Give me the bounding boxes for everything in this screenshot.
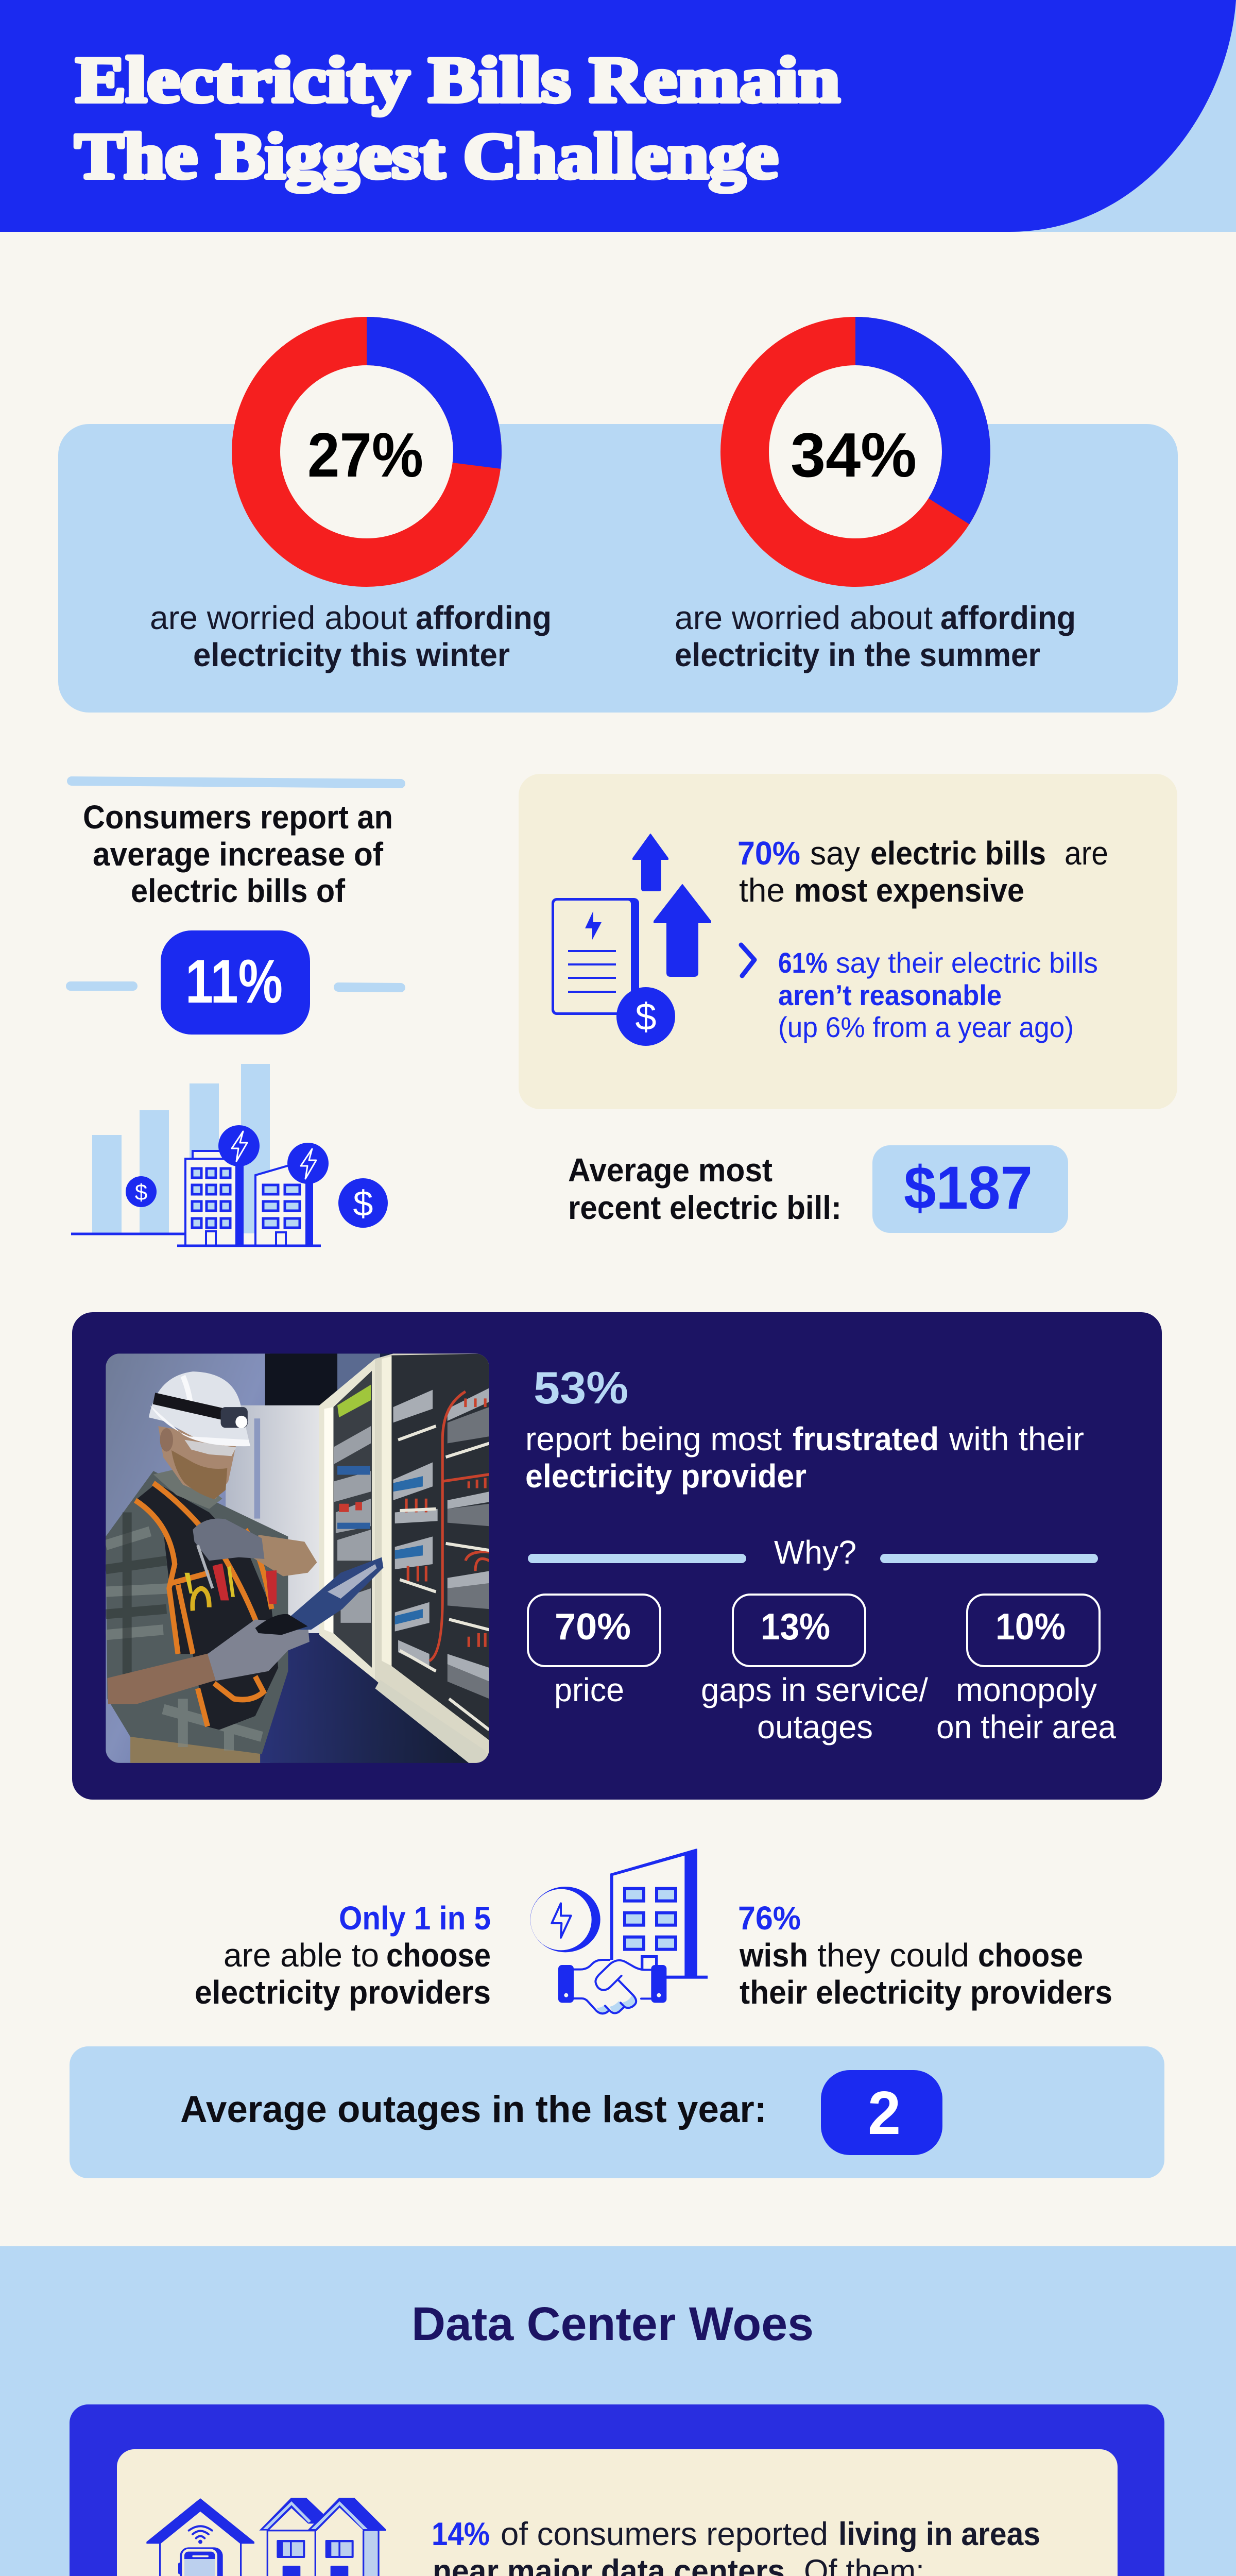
panel: average outages: Average outages in the last year: (180, 2089, 767, 2130)
heading: average increase: Consumers report an (83, 799, 393, 836)
text: 14% of consumers: 14% (432, 2516, 490, 2552)
caption: summer: are worried about (675, 599, 933, 636)
icon: bill with arrows and coin (552, 834, 711, 1046)
cabinet doors (319, 1359, 375, 1680)
photo: electrician at panel (106, 1353, 489, 1763)
text: only 1 in 5: electricity providers (195, 1974, 491, 2011)
card: 14% near data centers (117, 2449, 1118, 2576)
caption: winter: are worried about (150, 599, 407, 636)
badge: 2: 2 (868, 2079, 901, 2147)
reason: gaps in service: outages (757, 1708, 873, 1745)
icon: rising bars with buildings: $ (135, 1180, 147, 1205)
icon: smart home and houses (147, 2498, 386, 2576)
section: data center woes background (0, 2246, 1236, 2576)
text: 61% not reasonable: say their electric bills (836, 946, 1098, 979)
worker body (130, 1737, 261, 1763)
tools in pockets (213, 1564, 229, 1600)
text: only 1 in 5: choose (386, 1937, 491, 1974)
divider: why (528, 1534, 1098, 1571)
text: only 1 in 5: Only 1 in 5 (339, 1900, 491, 1937)
heading: average increase (83, 799, 393, 909)
panel: frustrated with provider (72, 1312, 1162, 1800)
text: 61% not reasonable: 61% (778, 946, 828, 979)
reason: gaps in service: 13% (761, 1606, 830, 1648)
text: 61% not reasonable: aren’t reasonable (778, 979, 1002, 1011)
panel: average outages (70, 2046, 1164, 2178)
badge: 11%: 11% (185, 947, 283, 1016)
badge: 11% (71, 930, 401, 1035)
reason: monopoly (936, 1595, 1116, 1745)
icon: chevron (741, 945, 754, 976)
reason: price: price (554, 1671, 624, 1708)
text: 70% most expensive (737, 835, 1108, 909)
stat: 53%: 53% (534, 1362, 628, 1413)
text: most frustrated (525, 1420, 1084, 1495)
text: most frustrated: electricity provider (525, 1458, 806, 1495)
title (75, 44, 840, 192)
heading: average increase: average increase of (93, 836, 384, 873)
caption: summer: affording (940, 599, 1076, 636)
donut chart: 27% winter (232, 317, 502, 587)
heading: average increase: electric bills of (131, 872, 346, 909)
terminal rows (393, 1388, 489, 1682)
text: 70% most expensive: the (739, 872, 785, 909)
donut chart: 27% winter: 27% (307, 420, 423, 490)
caption: winter: affording (416, 599, 552, 636)
text: 76% wish: wish (739, 1937, 808, 1974)
icon: rising bars with buildings (71, 1064, 388, 1246)
text: 14% of consumers (432, 2516, 1040, 2576)
caption: winter: electricity this winter (193, 636, 510, 673)
badge: $187 (872, 1145, 1068, 1233)
caption: summer: electricity in the summer (675, 636, 1040, 673)
text: most frustrated: report being most (525, 1420, 782, 1458)
text: 76% wish (738, 1900, 1112, 2011)
text: average most recent bill: recent electric bill: (568, 1189, 842, 1226)
text: 70% most expensive: most expensive (794, 872, 1024, 909)
reason: price: 70% (555, 1606, 631, 1648)
text: 76% wish: they could (817, 1937, 969, 1974)
text: 61% not reasonable (778, 946, 1098, 1043)
text: 76% wish: 76% (738, 1900, 801, 1937)
text: 14% of consumers: living in areas (838, 2516, 1040, 2552)
text: most frustrated: with their (949, 1420, 1084, 1458)
text: 70% most expensive: 70% (737, 835, 800, 872)
text: average most recent bill (568, 1151, 842, 1226)
donut chart: 34% summer: 34% (791, 420, 917, 490)
text: only 1 in 5: are able to (224, 1937, 379, 1974)
icon: building handshake (530, 1849, 708, 2013)
badge: $187: $187 (904, 1154, 1033, 1222)
worker head (153, 1467, 222, 1509)
panel: data center stats (70, 2404, 1164, 2576)
text: most frustrated: frustrated (793, 1420, 939, 1458)
donut chart: 34% summer (720, 317, 990, 587)
text: 70% most expensive: electric bills (870, 835, 1046, 872)
icon: rising bars with buildings: $ (353, 1183, 373, 1224)
text: only 1 in 5 (195, 1900, 491, 2011)
reason: monopoly: 10% (995, 1606, 1066, 1648)
text: 61% not reasonable: (up 6% from a year ago) (778, 1011, 1074, 1043)
reason: price (528, 1595, 660, 1708)
reason: monopoly: on their area (936, 1708, 1116, 1745)
panel: electric bills most expensive (519, 774, 1177, 1109)
text: 70% most expensive: are (1065, 835, 1108, 872)
panel: worry stats background (58, 424, 1178, 713)
caption: winter (150, 599, 552, 673)
top accent bar (72, 781, 401, 784)
title: Electricity Bills Remain (76, 44, 840, 116)
divider: why: Why? (774, 1534, 856, 1571)
reason: gaps in service (701, 1595, 928, 1745)
caption: summer (675, 599, 1076, 673)
header banner (0, 0, 1236, 232)
text: 14% of consumers: of consumers reported (501, 2516, 828, 2552)
reason: monopoly: monopoly (956, 1671, 1097, 1708)
worker arms and gloves (252, 1535, 317, 1576)
text: 76% wish: their electricity providers (740, 1974, 1112, 2011)
reason: gaps in service: gaps in service/ (701, 1671, 928, 1708)
text: average most recent bill: Average most (568, 1151, 772, 1189)
title: The Biggest Challenge (75, 121, 778, 192)
text: 70% most expensive: say (810, 835, 860, 872)
icon: bill with arrows and coin: $ (635, 995, 657, 1038)
badge: 2 (821, 2070, 942, 2155)
text: 76% wish: choose (978, 1937, 1083, 1974)
heading: data center woes: Data Center Woes (411, 2298, 814, 2350)
